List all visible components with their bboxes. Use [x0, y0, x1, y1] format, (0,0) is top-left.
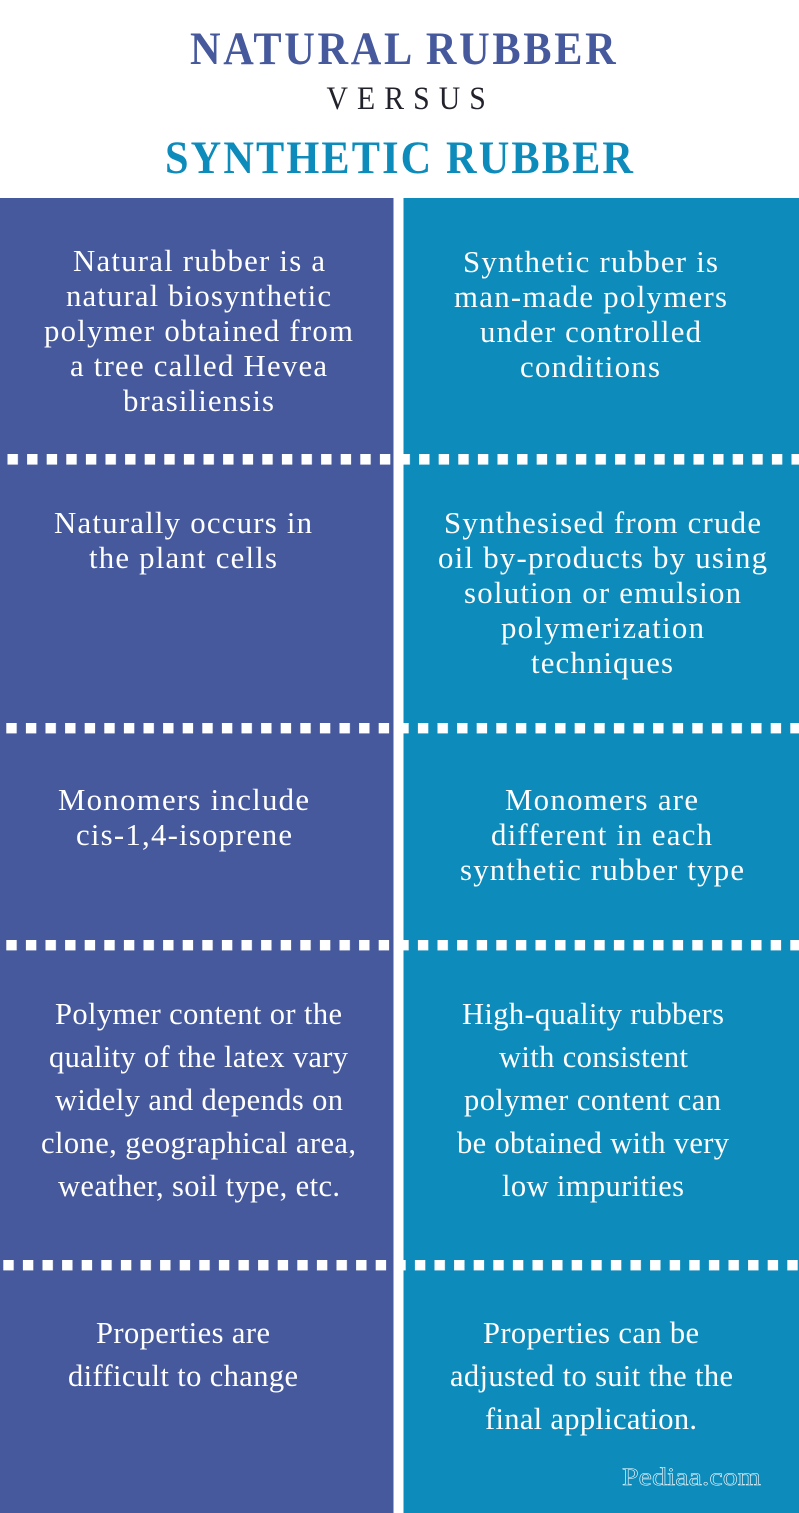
text: synthetic rubber properties: final application. [485, 1402, 697, 1436]
text: synthetic rubber monomers [460, 783, 744, 887]
text: synthetic rubber synthesis: Synthesised from crude [444, 506, 761, 540]
text: natural rubber monomers [58, 783, 309, 852]
text: natural rubber occurrence: Naturally occurs in [54, 506, 312, 540]
heading: synthetic rubber: SYNTHETIC RUBBER [165, 131, 634, 184]
dotted divider 1 [0, 454, 799, 465]
text: synthetic rubber definition [454, 245, 727, 384]
text: synthetic rubber definition: man-made polymers [454, 280, 727, 314]
text: synthetic rubber polymer content: low impurities [502, 1169, 684, 1203]
text: natural rubber definition: Natural rubber is a [73, 244, 325, 278]
text: synthetic rubber properties [450, 1316, 733, 1436]
text: synthetic rubber polymer content [457, 997, 730, 1203]
text: natural rubber polymer content: widely and depends on [55, 1083, 343, 1117]
text: natural rubber properties [68, 1316, 298, 1393]
text: synthetic rubber synthesis: techniques [531, 646, 673, 680]
text: natural rubber monomers: cis-1,4-isoprene [76, 818, 292, 852]
text: synthetic rubber definition: conditions [520, 350, 660, 384]
text: natural rubber definition: polymer obtained from [44, 314, 353, 348]
heading: versus: VERSUS [326, 80, 486, 116]
text: synthetic rubber polymer content: High-quality rubbers [462, 997, 724, 1031]
text: natural rubber polymer content: Polymer content or the [55, 997, 342, 1031]
text: natural rubber properties: Properties are [96, 1316, 270, 1350]
text: natural rubber polymer content: clone, geographical area, [41, 1126, 356, 1160]
text: natural rubber polymer content: quality of the latex vary [49, 1040, 349, 1074]
dotted divider 3 [0, 940, 799, 951]
text: synthetic rubber synthesis [438, 506, 767, 680]
text: natural rubber occurrence: the plant cells [89, 541, 277, 575]
text: synthetic rubber definition: Synthetic rubber is [463, 245, 718, 279]
dotted divider 2 [0, 723, 799, 734]
text: natural rubber definition: a tree called Hevea [70, 349, 327, 383]
text: natural rubber definition [44, 244, 353, 418]
text: natural rubber properties: difficult to change [68, 1359, 298, 1393]
text: synthetic rubber monomers: Monomers are [505, 783, 698, 817]
text: natural rubber occurrence [54, 506, 312, 575]
text: synthetic rubber synthesis: oil by-products by using [438, 541, 767, 575]
heading: natural rubber: NATURAL RUBBER [190, 22, 616, 75]
text: synthetic rubber polymer content: with consistent [499, 1040, 689, 1074]
text: natural rubber monomers: Monomers include [58, 783, 309, 817]
text: synthetic rubber properties: Properties can be [483, 1316, 699, 1350]
text: synthetic rubber monomers: synthetic rubber type [460, 853, 744, 887]
text: natural rubber polymer content [41, 997, 356, 1203]
text: synthetic rubber monomers: different in each [491, 818, 712, 852]
text: synthetic rubber polymer content: be obtained with very [457, 1126, 730, 1160]
text: natural rubber definition: natural biosynthetic [66, 279, 331, 313]
title block [165, 22, 634, 184]
text: synthetic rubber synthesis: polymerization [501, 611, 704, 645]
text: synthetic rubber properties: adjusted to suit the the [450, 1359, 733, 1393]
text: synthetic rubber polymer content: polymer content can [464, 1083, 721, 1117]
text: synthetic rubber definition: under controlled [480, 315, 702, 349]
text: natural rubber definition: brasiliensis [123, 384, 274, 418]
panel: synthetic rubber column [404, 198, 799, 1513]
text: natural rubber polymer content: weather, soil type, etc. [58, 1169, 340, 1203]
text: synthetic rubber synthesis: solution or emulsion [464, 576, 741, 610]
panel: natural rubber column [0, 198, 394, 1513]
dotted divider 4 [0, 1260, 799, 1271]
brand: Pediaa.com: Pediaa.com [622, 1464, 762, 1491]
